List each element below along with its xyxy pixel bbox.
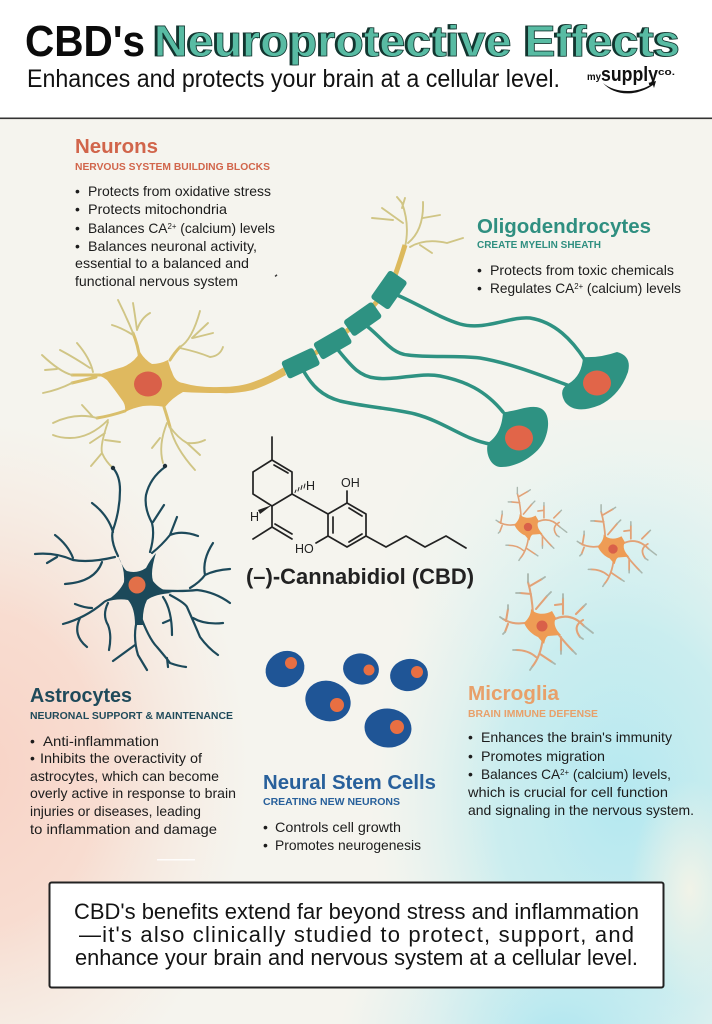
logo: [587, 64, 675, 93]
molecule: cannabidiol: H: [306, 479, 315, 493]
list: microglia: Balances CA: [481, 766, 562, 782]
list: neurons: •: [75, 238, 80, 254]
panel: astrocytes: [30, 684, 236, 837]
stem cell 3: [341, 651, 381, 687]
subheading: microglia: BRAIN IMMUNE DEFENSE: [468, 708, 598, 720]
list: microglia: •: [468, 748, 473, 764]
stem cell 5: [363, 707, 413, 749]
dendrite trunks: [72, 333, 180, 427]
dendrite branches: [42, 197, 463, 470]
panel: neural stem cells: [263, 771, 436, 853]
callout: [50, 882, 664, 988]
title: Neuroprotective Effects: [154, 17, 680, 66]
list: astrocytes: Inhibits the overactivity of: [40, 750, 202, 766]
list: neural stem cells: •: [263, 819, 268, 835]
microglia cell small: [496, 487, 567, 560]
astrocyte illustration: [35, 464, 230, 670]
list: neurons: (calcium) levels: [176, 220, 275, 236]
callout: —it's also clinically studied to protect, support, and: [79, 922, 634, 947]
header rule: [0, 118, 712, 119]
astrocyte nucleus: [128, 576, 146, 594]
list: microglia: •: [468, 729, 473, 745]
list: microglia: 2+: [560, 768, 569, 777]
header background: [0, 0, 712, 118]
list: neurons: Balances neuronal activity,: [88, 238, 257, 254]
molecule name: (–)-Cannabidiol (CBD): [246, 564, 474, 589]
list: neurons: essential to a balanced and: [75, 255, 249, 271]
list: neural stem cells: Promotes neurogenesis: [275, 837, 421, 853]
list: astrocytes: [30, 733, 236, 837]
logo: my: [587, 72, 601, 83]
nucleus left: [505, 426, 533, 450]
list: microglia: Promotes migration: [481, 748, 605, 764]
list: microglia: which is crucial for cell function: [467, 784, 668, 800]
list: microglia: Enhances the brain's immunity: [481, 729, 672, 745]
astrocyte branches: [35, 467, 230, 670]
list: oligodendrocytes: •: [477, 280, 482, 296]
subheading: neural stem cells: CREATING NEW NEURONS: [263, 796, 400, 808]
list: astrocytes: •: [30, 733, 35, 749]
heading: astrocytes: Astrocytes: [30, 684, 132, 707]
list: neural stem cells: Controls cell growth: [275, 819, 401, 835]
list: astrocytes: overly active in response to brain: [30, 785, 236, 801]
heading: neurons: Neurons: [75, 135, 158, 158]
oligodendrocyte illustration: [281, 270, 629, 467]
microglia cell medium: [577, 505, 656, 586]
list: microglia: (calcium) levels,: [569, 766, 671, 782]
list: oligodendrocytes: 2+: [574, 282, 583, 291]
list: neural stem cells: •: [263, 837, 268, 853]
stem cells illustration: [259, 644, 430, 749]
microglia illustration: [496, 487, 656, 670]
title: CBD's: [25, 17, 145, 66]
stem cell 1: [259, 644, 311, 694]
list: neurons: •: [75, 201, 80, 217]
heading: oligodendrocytes: Oligodendrocytes: [477, 215, 651, 238]
molecule: cannabidiol: OH: [341, 476, 360, 490]
list: neurons: Protects mitochondria: [88, 201, 227, 217]
subheading: oligodendrocytes: CREATE MYELIN SHEATH: [477, 239, 601, 251]
processes: [303, 295, 585, 444]
list: astrocytes: to inflammation and damage: [30, 821, 217, 837]
list: microglia: and signaling in the nervous system.: [468, 802, 694, 818]
list: oligodendrocytes: [477, 262, 681, 296]
astrocyte body: [105, 553, 172, 625]
list: neurons: Balances CA: [88, 220, 169, 236]
list: astrocytes: astrocytes, which can become: [30, 768, 219, 784]
logo: co.: [658, 67, 675, 77]
branch end dots: [111, 466, 115, 470]
list: oligodendrocytes: Protects from toxic chemicals: [490, 262, 674, 278]
nucleus right: [583, 370, 611, 396]
callout: CBD's benefits extend far beyond stress and inflammation: [74, 899, 639, 924]
neuron illustration: [42, 197, 463, 470]
panel: microglia: [467, 682, 694, 818]
molecule: cannabidiol: HO: [295, 542, 314, 556]
list: microglia: [467, 729, 694, 818]
skeletal formula: [253, 437, 466, 548]
stem cell 2: [300, 674, 356, 728]
list: astrocytes: injuries or diseases, leading: [30, 803, 201, 819]
callout: enhance your brain and nervous system at a cellular level.: [75, 945, 638, 970]
oligodendrocyte cell body left: [487, 407, 548, 467]
list: astrocytes: •: [30, 750, 35, 766]
list: oligodendrocytes: •: [477, 262, 482, 278]
logo: supply: [601, 64, 659, 86]
list: oligodendrocytes: Regulates CA: [490, 280, 576, 296]
neuron soma: [98, 352, 286, 412]
list: neurons: [75, 183, 275, 289]
subtitle: Enhances and protects your brain at a cellular level.: [27, 65, 560, 93]
subheading: neurons: NERVOUS SYSTEM BUILDING BLOCKS: [75, 161, 270, 173]
list: neurons: Protects from oxidative stress: [88, 183, 271, 199]
axon: [285, 245, 405, 371]
microglia cell large: [500, 574, 593, 670]
molecule: cannabidiol: H: [250, 510, 259, 524]
list: oligodendrocytes: (calcium) levels: [583, 280, 681, 296]
heading: microglia: Microglia: [468, 682, 560, 705]
panel: neurons: [75, 135, 275, 289]
heading: neural stem cells: Neural Stem Cells: [263, 771, 436, 794]
list: astrocytes: Anti-inflammation: [43, 733, 159, 749]
molecule: cannabidiol: [250, 437, 466, 556]
list: neurons: •: [75, 183, 80, 199]
subheading: astrocytes: NEURONAL SUPPORT & MAINTENANCE: [30, 710, 233, 722]
list: neurons: 2+: [167, 222, 177, 231]
stem cell 4: [388, 656, 430, 694]
neuron nucleus: [134, 372, 162, 396]
oligodendrocyte cell body right: [562, 352, 629, 409]
list: microglia: •: [468, 766, 473, 782]
list: neural stem cells: [263, 819, 421, 853]
myelin segments: [281, 270, 408, 379]
panel: oligodendrocytes: [477, 215, 681, 296]
list: neurons: •: [75, 220, 80, 236]
list: neurons: functional nervous system: [75, 273, 238, 289]
